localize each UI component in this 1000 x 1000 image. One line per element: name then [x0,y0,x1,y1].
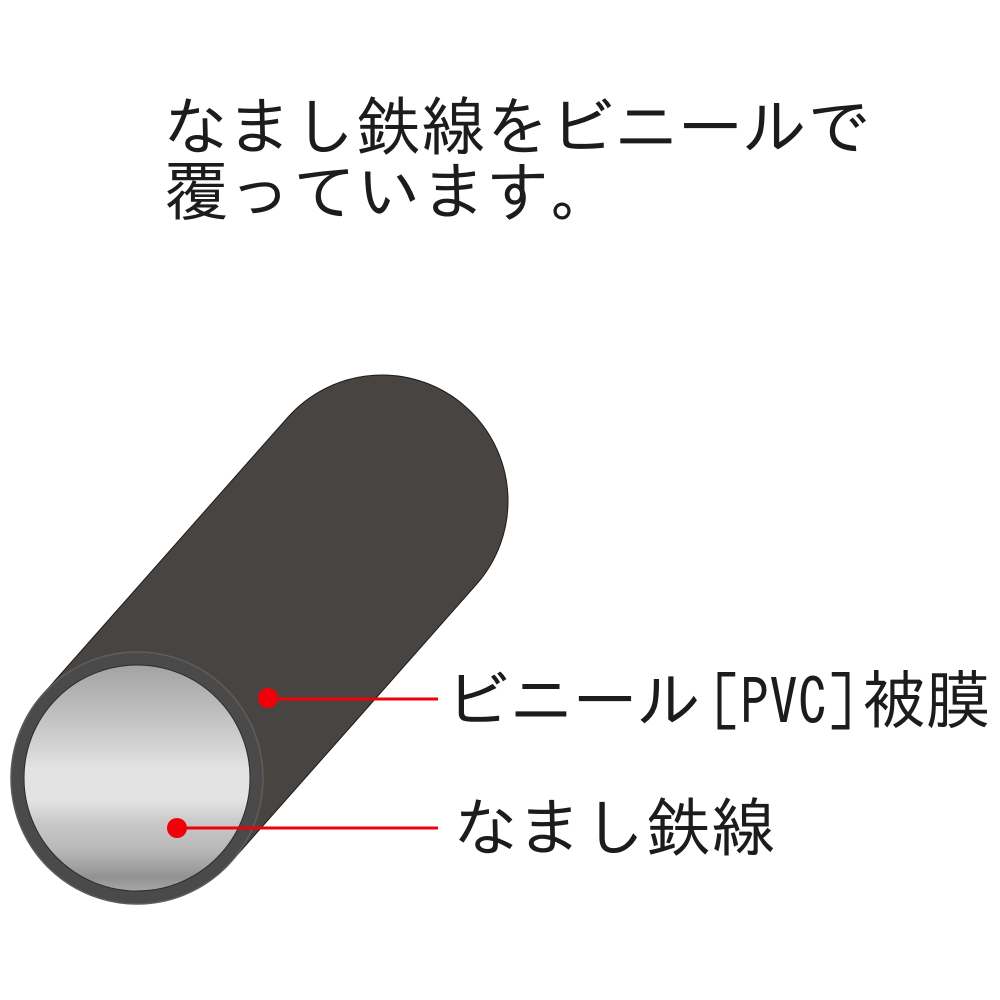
callout: vinyl PVC coating: 被膜 [862,667,990,731]
annealed iron wire core [24,665,250,891]
title [163,93,871,223]
callout: vinyl PVC coating: [PVC] [711,669,856,733]
callout: annealed iron wire [167,794,775,859]
vinyl coating body [11,375,508,904]
callout: vinyl PVC coating [258,667,990,733]
title: なまし鉄線をビニールで [163,93,871,158]
callout: annealed iron wire: なまし鉄線 [453,794,775,859]
callout: vinyl PVC coating: ビニール [445,667,701,731]
title: 覆っています。 [164,158,615,223]
cylinder illustration [11,375,508,904]
cut end vinyl ring [11,652,263,904]
